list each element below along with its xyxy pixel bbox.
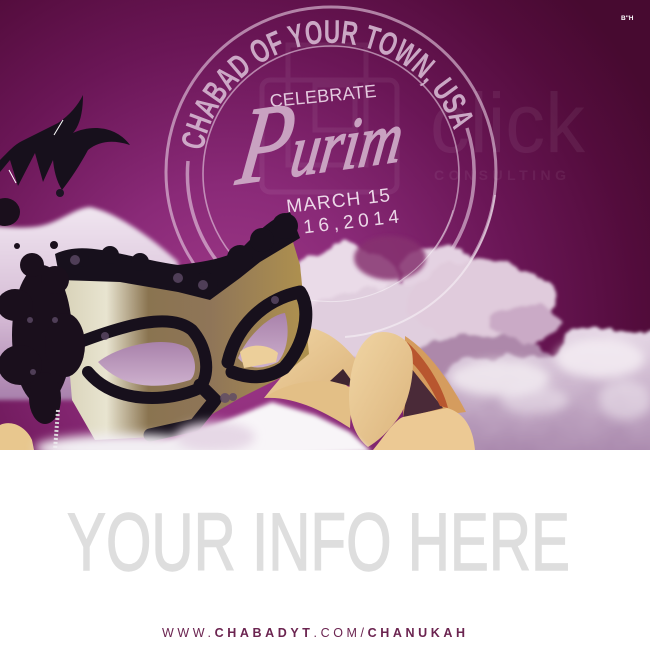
purple gradient background <box>0 0 650 450</box>
centre and right clouds <box>293 246 561 384</box>
watermark: consulting logo: CONSULTING <box>434 167 571 183</box>
purim script title: Purim <box>230 62 413 209</box>
watermark: consulting logo <box>262 45 586 192</box>
sequin glints <box>27 255 279 403</box>
stamp badge <box>164 6 498 284</box>
B"H mark: B"H <box>621 15 634 22</box>
feather plume <box>0 95 130 197</box>
eye holes <box>98 313 288 386</box>
cookie behind right eye <box>240 346 278 368</box>
pearl strand <box>55 410 58 450</box>
left cloud <box>0 207 178 400</box>
cloud puffs <box>35 422 255 462</box>
black eye trim <box>80 292 306 435</box>
cloud highlights <box>450 338 650 420</box>
lower right cloud <box>444 324 650 450</box>
cookie at bottom left <box>0 423 34 450</box>
date first line: MARCH 15 <box>285 185 391 218</box>
small cookie <box>264 328 358 428</box>
website address: WWW. CHABADYT .COM/ CHANUKAH <box>162 626 465 640</box>
badge curved title: CHABAD OF YOUR TOWN, USA <box>182 20 473 148</box>
celebrate label: CELEBRATE <box>269 81 377 111</box>
masquerade mask <box>0 95 309 450</box>
badge rings seen through clouds <box>310 195 495 337</box>
large cookie <box>349 332 475 450</box>
hamantaschen cookies <box>264 328 475 450</box>
purple gap in cloud <box>354 236 426 280</box>
sequin top band <box>55 212 300 300</box>
clouds behind mask <box>0 207 650 470</box>
badge rings <box>164 6 498 284</box>
white info panel <box>67 497 570 640</box>
gold mask face <box>62 232 309 440</box>
date second line: 16,2014 <box>302 207 400 238</box>
hero photo panel <box>0 0 650 450</box>
watermark: consulting logo: click <box>430 76 586 170</box>
cloud base under the cookies <box>170 399 374 450</box>
foreground cloud <box>31 399 374 450</box>
sequin flower at left <box>0 198 85 424</box>
